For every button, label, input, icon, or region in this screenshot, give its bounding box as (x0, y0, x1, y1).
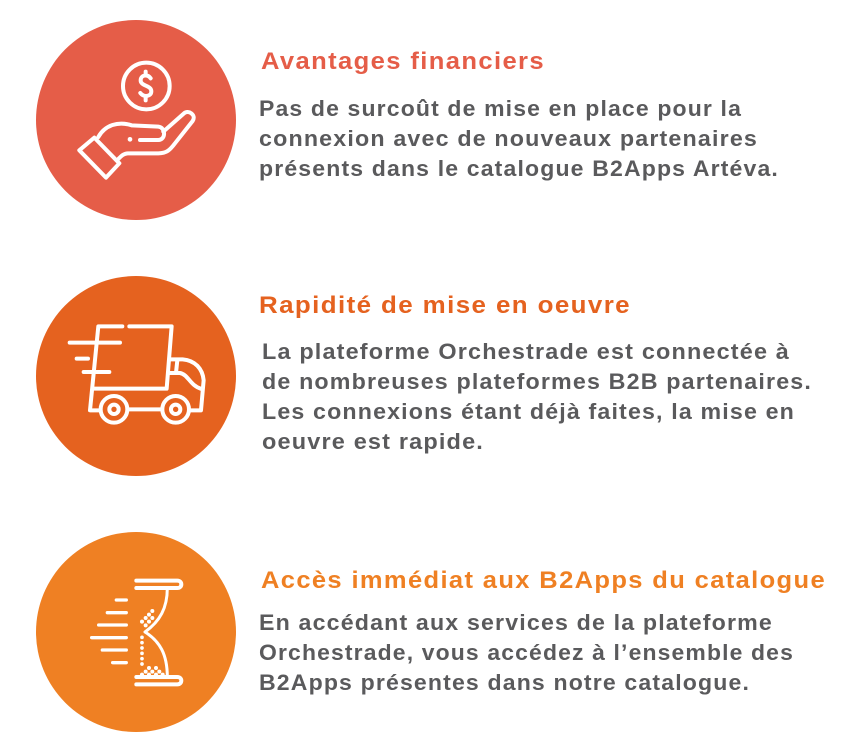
circle: dark orange background (36, 276, 236, 476)
text block: financial description: connexion avec de nouveaux partenaires (259, 126, 758, 151)
text block: speed description: de nombreuses plateformes B2B partenaires. (262, 369, 812, 394)
panel: avantages financiers (36, 20, 779, 220)
icon: hand holding dollar coin (79, 63, 194, 178)
text block: speed description: oeuvre est rapide. (262, 429, 484, 454)
heading: Accès immédiat aux B2Apps du catalogue: Accès immédiat aux B2Apps du catalogue (261, 567, 826, 594)
text block: financial description: présents dans le catalogue B2Apps Artéva. (259, 156, 779, 181)
text block: speed description: Les connexions étant déjà faites, la mise en (262, 399, 795, 424)
heading: Avantages financiers: Avantages financiers (261, 48, 545, 75)
text block: access description: En accédant aux services de la plateforme (259, 610, 773, 635)
text block: access description (259, 610, 794, 695)
circle: red background (36, 20, 236, 220)
heading: Rapidité de mise en oeuvre: Rapidité de mise en oeuvre (259, 292, 631, 319)
circle: orange background (36, 532, 236, 732)
text block: financial description: Pas de surcoût de mise en place pour la (259, 96, 742, 121)
panel: accès immédiat (36, 532, 826, 732)
text block: speed description (262, 339, 812, 454)
text block: access description: Orchestrade, vous accédez à l’ensemble des (259, 640, 794, 665)
text block: access description: B2Apps présentes dans notre catalogue. (259, 670, 750, 695)
icon: hourglass with speed lines (92, 581, 181, 684)
text block: speed description: La plateforme Orchestrade est connectée à (262, 339, 790, 364)
icon: fast delivery truck (70, 326, 204, 423)
panel: rapidité de mise en oeuvre (36, 276, 812, 476)
text block: financial description (259, 96, 779, 181)
